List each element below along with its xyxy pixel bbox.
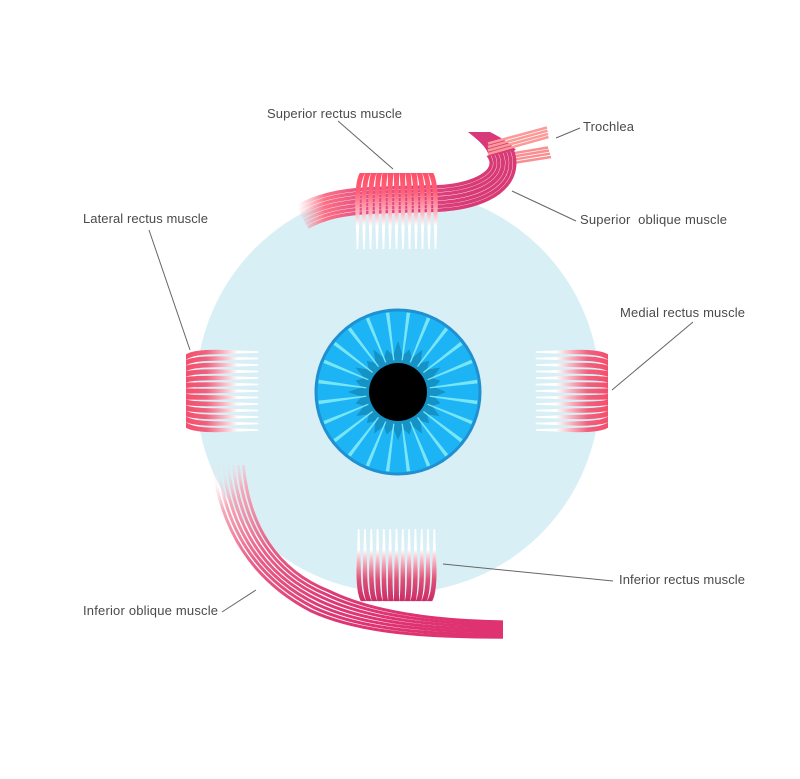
iris disc (316, 310, 480, 474)
superior oblique tip (468, 132, 516, 157)
superior oblique muscle (302, 132, 503, 217)
label: superior oblique muscle: Superior oblique muscle (580, 212, 727, 227)
label: trochlea (556, 119, 635, 138)
label: superior rectus muscle (267, 106, 402, 169)
label: medial rectus muscle (612, 305, 745, 390)
label: inferior rectus muscle: Inferior rectus muscle (619, 572, 745, 587)
label: lateral rectus muscle (83, 211, 208, 350)
eyeball (196, 189, 600, 593)
medial rectus muscle (536, 350, 608, 432)
iris inner star (348, 341, 446, 440)
pupil (369, 363, 427, 421)
label: inferior rectus muscle (443, 564, 745, 587)
label: inferior oblique muscle (83, 590, 256, 618)
inferior rectus muscle (356, 529, 437, 601)
label: inferior oblique muscle: Inferior oblique muscle (83, 603, 218, 618)
superior rectus muscle (355, 173, 438, 249)
iris and pupil (316, 310, 480, 474)
trochlea upper tendon (488, 128, 548, 154)
label: medial rectus muscle: Medial rectus muscle (620, 305, 745, 320)
lateral rectus muscle (186, 350, 258, 432)
label: trochlea: Trochlea (583, 119, 635, 134)
inferior oblique muscle (213, 465, 503, 637)
iris rays (318, 312, 478, 472)
label: superior oblique muscle (512, 191, 727, 227)
label: lateral rectus muscle: Lateral rectus muscle (83, 211, 208, 226)
label: superior rectus muscle: Superior rectus muscle (267, 106, 402, 121)
trochlea lower tendon (513, 148, 551, 163)
